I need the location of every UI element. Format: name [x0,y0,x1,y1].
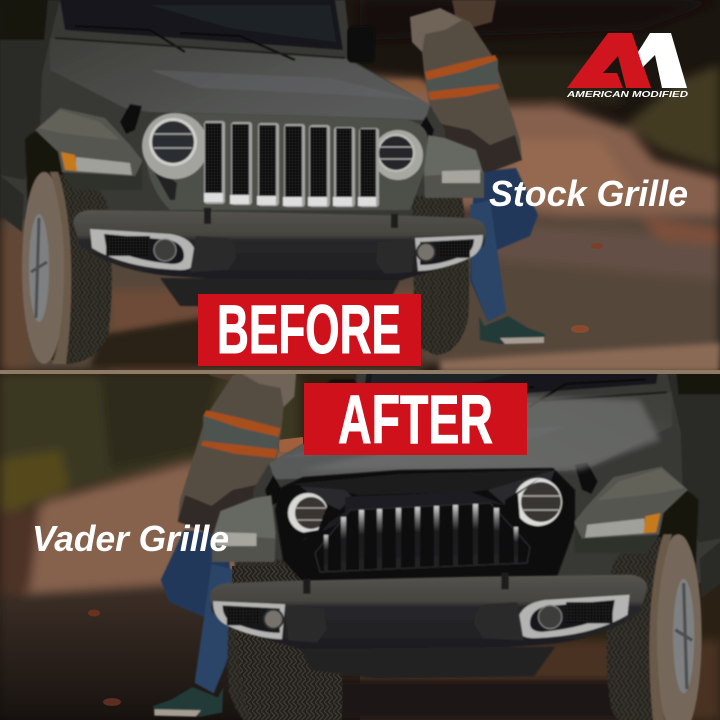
grille bars [324,504,518,571]
label: AFTER: AFTER [338,381,493,458]
jeep bumper and fenders [35,108,486,308]
top photo: stock grille scene [0,0,720,372]
logo mark: red A [567,33,651,88]
vader grille [275,468,575,583]
background: trees, rock and ground [0,0,720,372]
grille opening [315,503,530,572]
person leaning on the jeep [410,0,545,344]
stock grille [142,113,428,210]
headlight right [505,478,562,532]
label: BEFORE: BEFORE [217,291,401,368]
headlight left [142,113,208,179]
logo wordmark: AMERICAN MODIFIED [566,90,688,99]
person leaning on the jeep [153,352,296,717]
jeep body and hood [253,352,720,598]
jeep tires [228,490,702,720]
chrome grille slots [204,121,379,207]
bottom photo: vader grille scene [0,352,720,720]
logo mark: white M [638,33,687,88]
caption: Vader Grille: Vader Grille [32,518,229,559]
logo: American Modified [566,33,688,99]
jeep body and hood [0,0,445,232]
caption: Stock Grille: Stock Grille [489,173,688,214]
background: trees, rock and ground [0,374,720,720]
logo counter [603,56,626,88]
headlight left [288,493,340,540]
jeep bumper and fenders [210,466,688,678]
label: BEFORE [198,291,421,368]
headlight right [373,130,423,180]
near tire [232,566,342,720]
hood highlight [300,395,660,470]
jeep tires [22,130,469,364]
light divider strip [0,370,720,374]
